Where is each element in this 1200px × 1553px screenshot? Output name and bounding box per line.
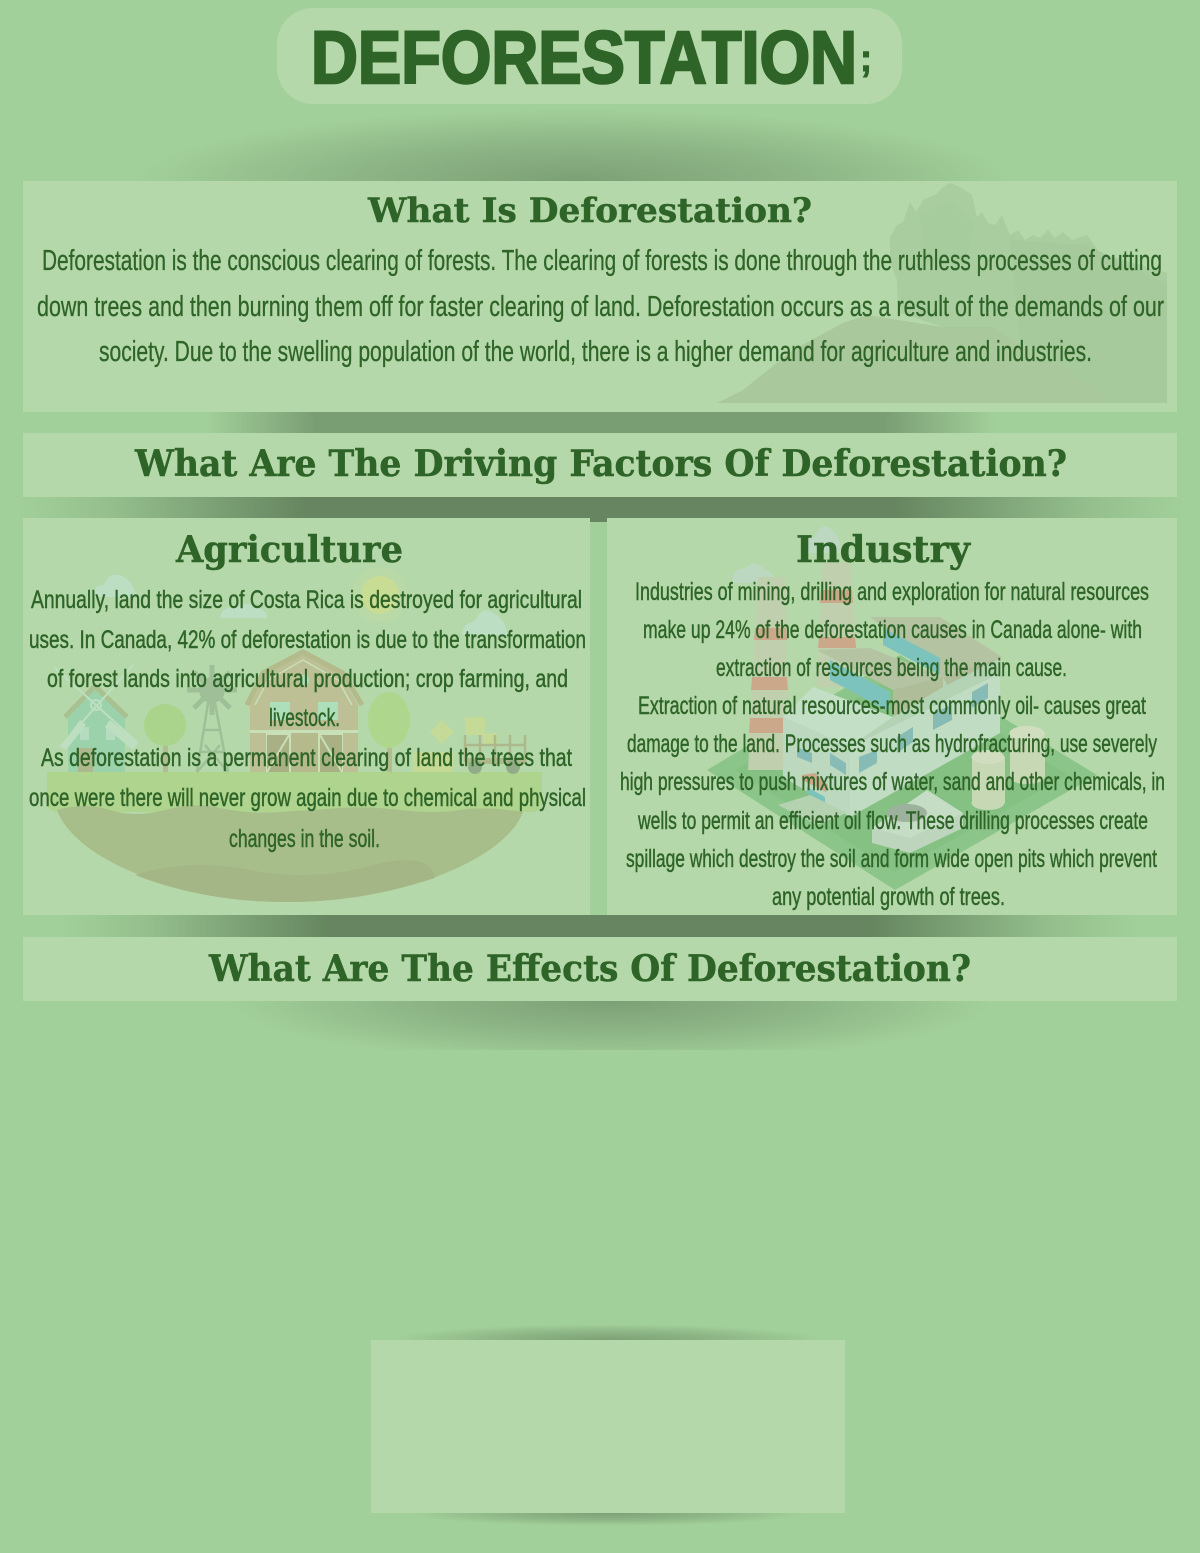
body text [620, 578, 1165, 911]
body text: any potential growth of trees. [772, 883, 1005, 911]
body text: once were there will never grow again due to chemical and physical [29, 784, 586, 812]
body text: As deforestation is a permanent clearing of land the trees that [41, 744, 572, 772]
illustration: factory [707, 526, 1097, 890]
illustration: farm [47, 567, 542, 902]
heading: What Are The Driving Factors Of Deforestation? [134, 443, 1067, 485]
heading: What Are The Effects Of Deforestation? [208, 948, 971, 990]
body text [37, 245, 1164, 368]
panel: effects heading [23, 937, 1177, 1001]
body text: uses. In Canada, 42% of deforestation is due to the transformation [29, 626, 586, 654]
body text: of forest lands into agricultural production; crop farming, and [47, 665, 568, 693]
panel: empty bottom box [371, 1340, 845, 1513]
panel: driving factors heading [23, 433, 1177, 497]
title: DEFORESTATION [311, 16, 857, 99]
panel: what is deforestation [23, 181, 1177, 412]
heading: Agriculture [175, 529, 403, 571]
body text [29, 586, 586, 853]
panel: agriculture [23, 518, 590, 915]
illustration: forest on a hill [717, 183, 1167, 403]
title pill [277, 8, 902, 104]
body text: changes in the soil. [229, 825, 380, 853]
heading: Industry [796, 529, 971, 571]
body text: livestock. [269, 704, 340, 732]
panel: industry [607, 518, 1177, 915]
title: ; [860, 38, 872, 80]
body text: Annually, land the size of Costa Rica is destroyed for agricultural [31, 586, 582, 614]
heading: What Is Deforestation? [367, 191, 812, 231]
